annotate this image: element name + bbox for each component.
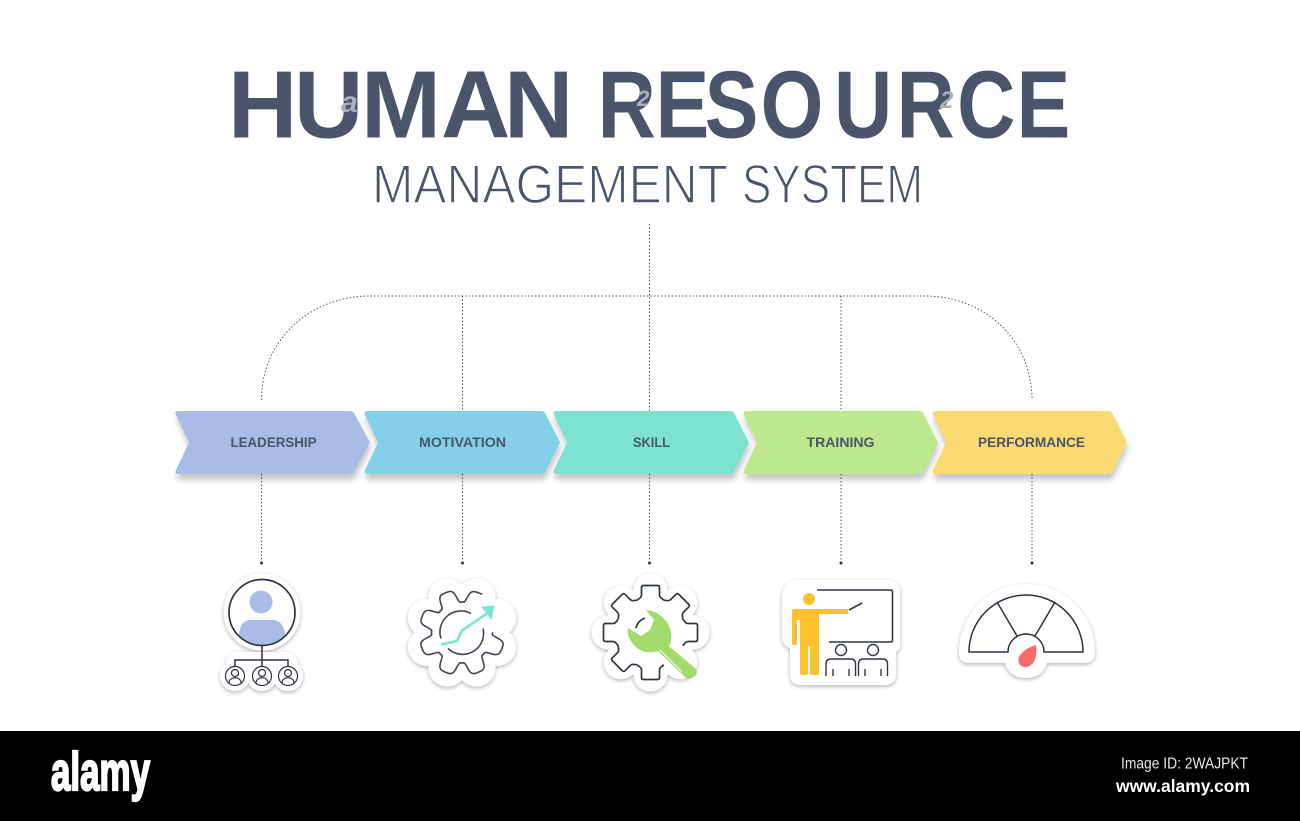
footer bar [0, 731, 1300, 821]
title [228, 51, 1070, 158]
arrow: skill: SKILL [633, 435, 670, 450]
icon: motivation gear [408, 578, 516, 687]
image id: Image ID: 2WAJPKT [1121, 756, 1248, 772]
arrow: performance [932, 411, 1127, 474]
icon: leadership [220, 574, 303, 691]
title: RESOURCE [598, 51, 1070, 158]
subtitle: MANAGEMENT [372, 153, 728, 215]
connector lines [262, 224, 1032, 562]
subtitle: SYSTEM [742, 153, 923, 215]
arrow: performance: PERFORMANCE [978, 435, 1085, 450]
icon: training presenter [782, 580, 900, 685]
stock watermark marks: 2 [636, 86, 650, 111]
website: www.alamy.com [1115, 776, 1250, 796]
arrow: training [743, 411, 938, 474]
stock watermark marks: 2 [939, 87, 954, 114]
icon: skill gear and wrench [592, 574, 710, 692]
arrow: training: TRAINING [806, 435, 874, 450]
logo: alamy: alamy [51, 742, 150, 802]
stock watermark marks: a [341, 86, 358, 119]
arrow: skill [553, 411, 749, 474]
arrow: motivation: MOTIVATION [419, 435, 506, 450]
arrow: leadership: LEADERSHIP [230, 435, 316, 450]
connector end dots [260, 562, 1034, 564]
arrow: leadership [175, 411, 370, 474]
arrow: motivation [364, 411, 560, 474]
icon: performance gauge [959, 584, 1095, 678]
title: HUMAN [228, 52, 573, 158]
stock watermark marks [341, 86, 954, 119]
